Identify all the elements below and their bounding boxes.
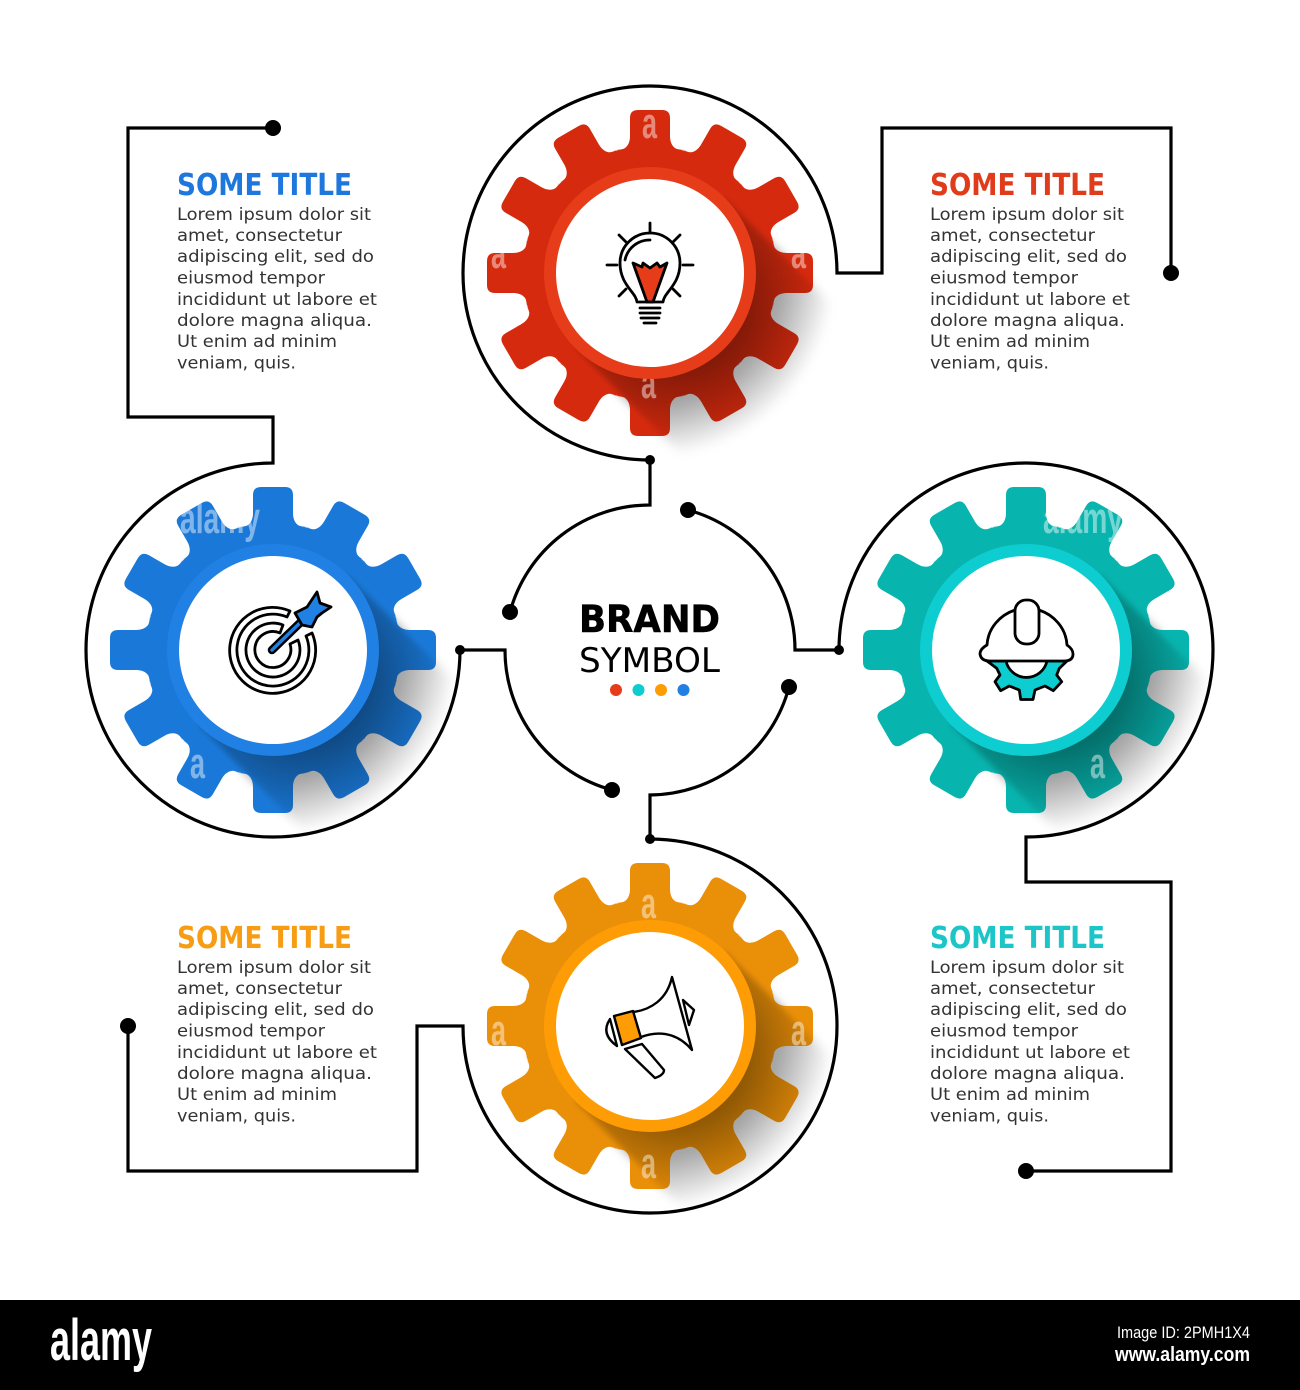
text block: blue: amet, consectetur	[177, 226, 342, 245]
gear: red with lightbulb: a	[491, 229, 506, 278]
gear: orange with megaphone	[487, 863, 826, 1202]
text block: teal: Ut enim ad minim	[930, 1085, 1090, 1104]
gear: orange with megaphone: a	[791, 1006, 806, 1055]
gear: red with lightbulb: a	[641, 359, 656, 408]
text block: red: Ut enim ad minim	[930, 332, 1090, 351]
text block: orange: adipiscing elit, sed do	[177, 1000, 374, 1019]
footer bar: www.alamy.com	[1114, 1344, 1250, 1366]
text block: blue: adipiscing elit, sed do	[177, 247, 374, 266]
gear: red with lightbulb: a	[791, 229, 806, 278]
text block: red: SOME TITLE	[930, 168, 1105, 203]
connector: orange line	[128, 839, 837, 1213]
text block: blue: Lorem ipsum dolor sit	[177, 205, 372, 224]
text block: teal	[930, 921, 1131, 1126]
connector: blue line	[86, 128, 460, 837]
icon: helmet and gear	[980, 600, 1073, 700]
text block: teal: veniam, quis.	[930, 1106, 1049, 1126]
gear: teal with helmet	[863, 487, 1202, 826]
text block: blue	[177, 168, 378, 372]
text block: teal: eiusmod tempor	[930, 1022, 1078, 1040]
text block: orange: amet, consectetur	[177, 979, 342, 998]
brand symbol: BRAND	[579, 598, 720, 641]
text block: teal: amet, consectetur	[930, 979, 1095, 998]
text block: red: eiusmod tempor	[930, 268, 1078, 288]
gear: teal with helmet: a	[1090, 739, 1105, 788]
gear: orange with megaphone: a	[641, 879, 656, 928]
text block: blue: veniam, quis.	[177, 354, 296, 372]
text block: teal: SOME TITLE	[930, 921, 1105, 956]
text block: orange: eiusmod tempor	[177, 1022, 325, 1040]
footer bar: alamy	[50, 1308, 152, 1373]
text block: blue: dolore magna aliqua.	[177, 311, 372, 330]
text block: red: veniam, quis.	[930, 354, 1049, 372]
connector dots	[120, 120, 1179, 1179]
gear: red with lightbulb	[487, 110, 826, 450]
footer bar	[0, 1300, 1300, 1390]
text block: orange: Lorem ipsum dolor sit	[177, 958, 372, 977]
text block: teal: dolore magna aliqua.	[930, 1064, 1125, 1083]
text block: red: dolore magna aliqua.	[930, 311, 1125, 330]
gear: blue with target: alamy	[180, 494, 260, 543]
gear: blue with target: a	[190, 739, 205, 788]
text block: red	[930, 168, 1131, 372]
icon: lightbulb	[607, 223, 693, 323]
connector: teal line	[839, 463, 1213, 1171]
text block: red: adipiscing elit, sed do	[930, 247, 1127, 266]
gear: red with lightbulb: a	[642, 99, 657, 148]
text block: orange: dolore magna aliqua.	[177, 1064, 372, 1083]
text block: orange: incididunt ut labore et	[177, 1043, 378, 1062]
gear: orange with megaphone: a	[641, 1139, 656, 1188]
text block: blue: incididunt ut labore et	[177, 290, 378, 309]
footer bar: Image ID: 2PMH1X4	[1117, 1323, 1250, 1342]
text block: blue: eiusmod tempor	[177, 268, 325, 288]
icon: target with arrow	[230, 592, 331, 693]
gear: blue with target	[110, 487, 450, 826]
gear: orange with megaphone: a	[491, 1006, 506, 1055]
text block: orange	[177, 921, 378, 1126]
icon: megaphone	[606, 977, 694, 1078]
text block: teal: Lorem ipsum dolor sit	[930, 958, 1125, 977]
gear: teal with helmet: alamy	[1043, 494, 1123, 543]
text block: blue: Ut enim ad minim	[177, 332, 337, 351]
connector: red line	[463, 86, 1171, 460]
text block: orange: SOME TITLE	[177, 921, 352, 956]
text block: orange: veniam, quis.	[177, 1106, 296, 1126]
text block: red: amet, consectetur	[930, 226, 1095, 245]
brand symbol: SYMBOL	[579, 641, 720, 681]
text block: red: incididunt ut labore et	[930, 290, 1131, 309]
text block: teal: adipiscing elit, sed do	[930, 1000, 1127, 1019]
text block: blue: SOME TITLE	[177, 168, 352, 203]
brand symbol	[579, 598, 720, 696]
center ring segments	[460, 460, 839, 839]
text block: orange: Ut enim ad minim	[177, 1085, 337, 1104]
text block: red: Lorem ipsum dolor sit	[930, 205, 1125, 224]
text block: teal: incididunt ut labore et	[930, 1043, 1131, 1062]
